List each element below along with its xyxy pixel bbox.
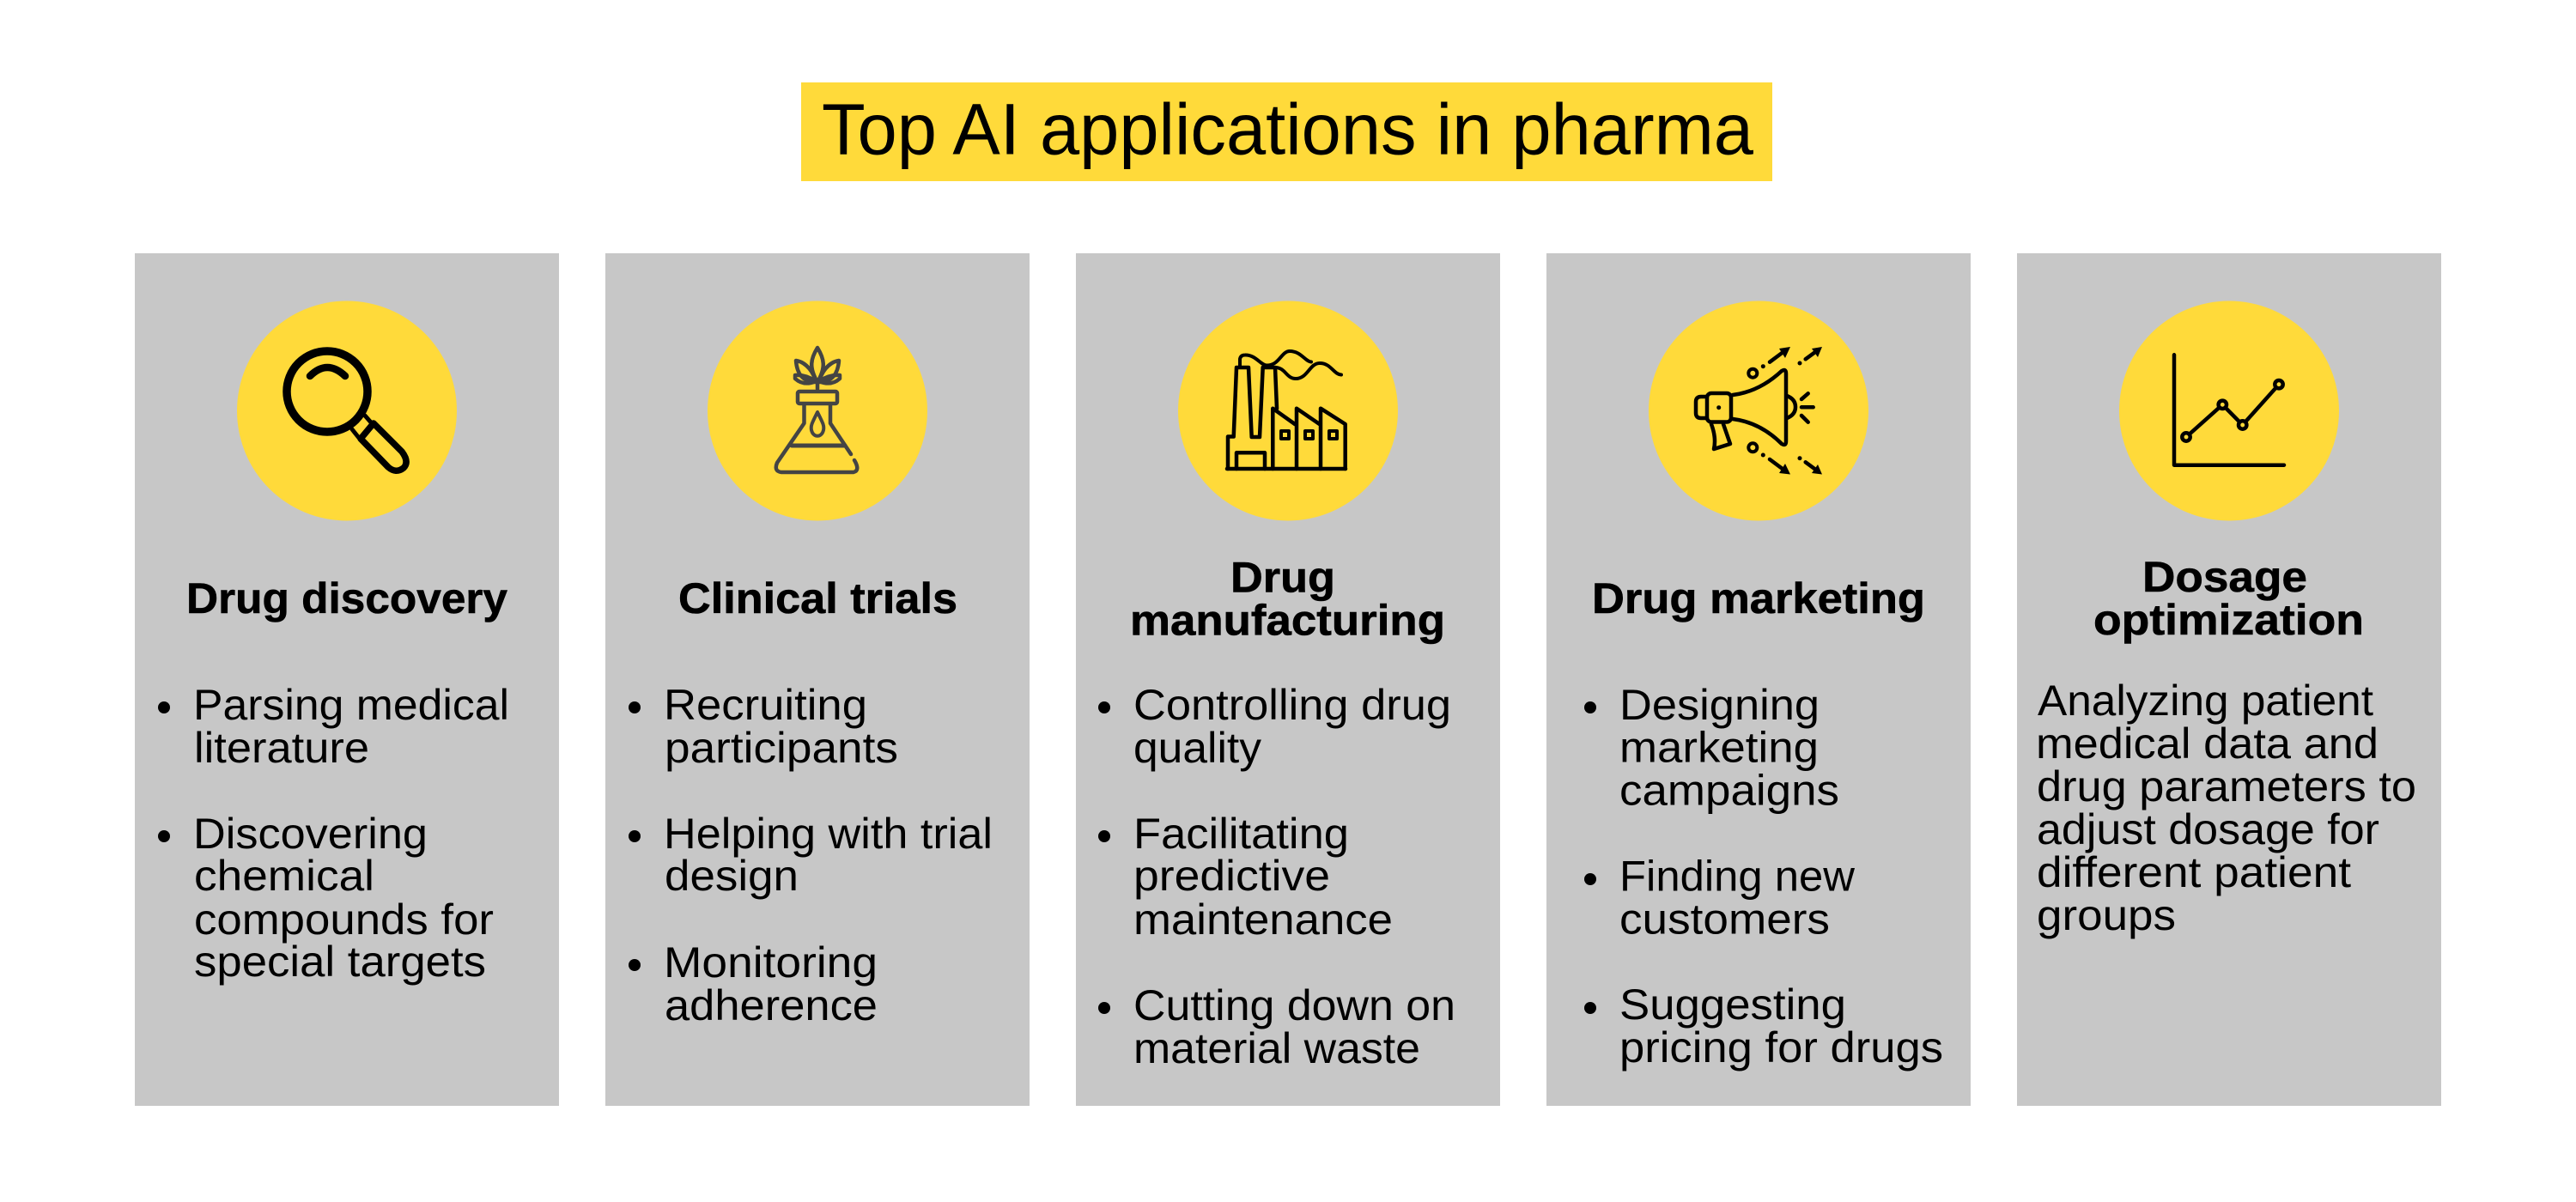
bullet list: clinical trials: participants <box>665 724 898 772</box>
panel: drug discovery <box>135 253 559 1106</box>
heading: dosage optimization <box>2093 553 2364 644</box>
bullet list: drug manufacturing <box>1098 681 1455 1072</box>
bullet list: drug marketing <box>1584 681 1943 1071</box>
bullet list: drug marketing: customers <box>1619 895 1830 943</box>
text block: dosage optimization: Analyzing patient <box>2038 677 2373 725</box>
heading: dosage optimization: optimization <box>2093 596 2364 644</box>
heading: drug manufacturing: manufacturing <box>1130 596 1445 644</box>
heading: drug marketing: Drug marketing <box>1592 574 1925 622</box>
bullet list: drug manufacturing: Controlling drug <box>1133 681 1451 729</box>
bullet list: drug manufacturing: material waste <box>1133 1024 1420 1072</box>
icon: flask with leaf <box>776 348 857 472</box>
panel: dosage optimization <box>2017 253 2441 1106</box>
icon: line chart <box>2174 355 2284 465</box>
bullet list: drug marketing: Finding new <box>1619 852 1856 900</box>
text block: dosage optimization: groups <box>2037 891 2176 939</box>
bullet list: drug marketing: campaigns <box>1619 766 1839 814</box>
text block: dosage optimization: medical data and <box>2036 719 2379 768</box>
bullet list: drug marketing: Designing <box>1619 681 1820 729</box>
bullet list: drug discovery: chemical <box>194 852 374 900</box>
bullet list: drug discovery: Discovering <box>193 810 428 858</box>
bullet list: clinical trials: Recruiting <box>664 681 867 729</box>
bullet list: drug manufacturing: quality <box>1133 724 1261 772</box>
bullet list: drug discovery <box>158 681 509 986</box>
text block: dosage optimization <box>2036 677 2416 939</box>
bullet list: drug manufacturing: Cutting down on <box>1133 981 1455 1029</box>
bullet list: drug manufacturing: maintenance <box>1133 895 1393 944</box>
title: Top AI applications in pharma <box>822 89 1753 170</box>
bullet list: drug discovery: Parsing medical <box>193 681 509 729</box>
heading: drug manufacturing: Drug <box>1230 553 1335 601</box>
icon: magnifying glass <box>287 351 406 470</box>
bullet list: clinical trials: Helping with trial <box>664 810 993 858</box>
icon: megaphone <box>1696 347 1822 474</box>
text block: dosage optimization: drug parameters to <box>2037 762 2416 810</box>
heading: clinical trials: Clinical trials <box>678 574 957 622</box>
bullet list: drug manufacturing: Facilitating <box>1133 810 1349 858</box>
panel: drug marketing <box>1546 253 1971 1106</box>
heading: drug manufacturing <box>1130 553 1445 644</box>
bullet list: drug marketing: Suggesting <box>1619 980 1846 1029</box>
icon: factory <box>1227 351 1346 469</box>
panel: drug manufacturing <box>1076 253 1500 1106</box>
text block: dosage optimization: different patient <box>2037 848 2351 896</box>
bullet list: clinical trials: design <box>665 852 799 900</box>
bullet list: drug manufacturing: predictive <box>1133 852 1330 900</box>
heading: dosage optimization: Dosage <box>2142 553 2307 601</box>
panel: clinical trials <box>605 253 1030 1106</box>
bullet list: drug discovery: compounds for <box>194 895 494 944</box>
bullet list: drug marketing: pricing for drugs <box>1619 1023 1943 1071</box>
bullet list: clinical trials: adherence <box>665 981 878 1029</box>
heading: drug discovery: Drug discovery <box>186 574 507 622</box>
text block: dosage optimization: adjust dosage for <box>2037 805 2379 853</box>
bullet list: drug marketing: marketing <box>1619 723 1819 771</box>
bullet list: drug discovery: special targets <box>194 938 486 986</box>
bullet list: clinical trials: Monitoring <box>664 938 878 986</box>
bullet list: clinical trials <box>629 681 993 1029</box>
bullet list: drug discovery: literature <box>194 724 369 772</box>
